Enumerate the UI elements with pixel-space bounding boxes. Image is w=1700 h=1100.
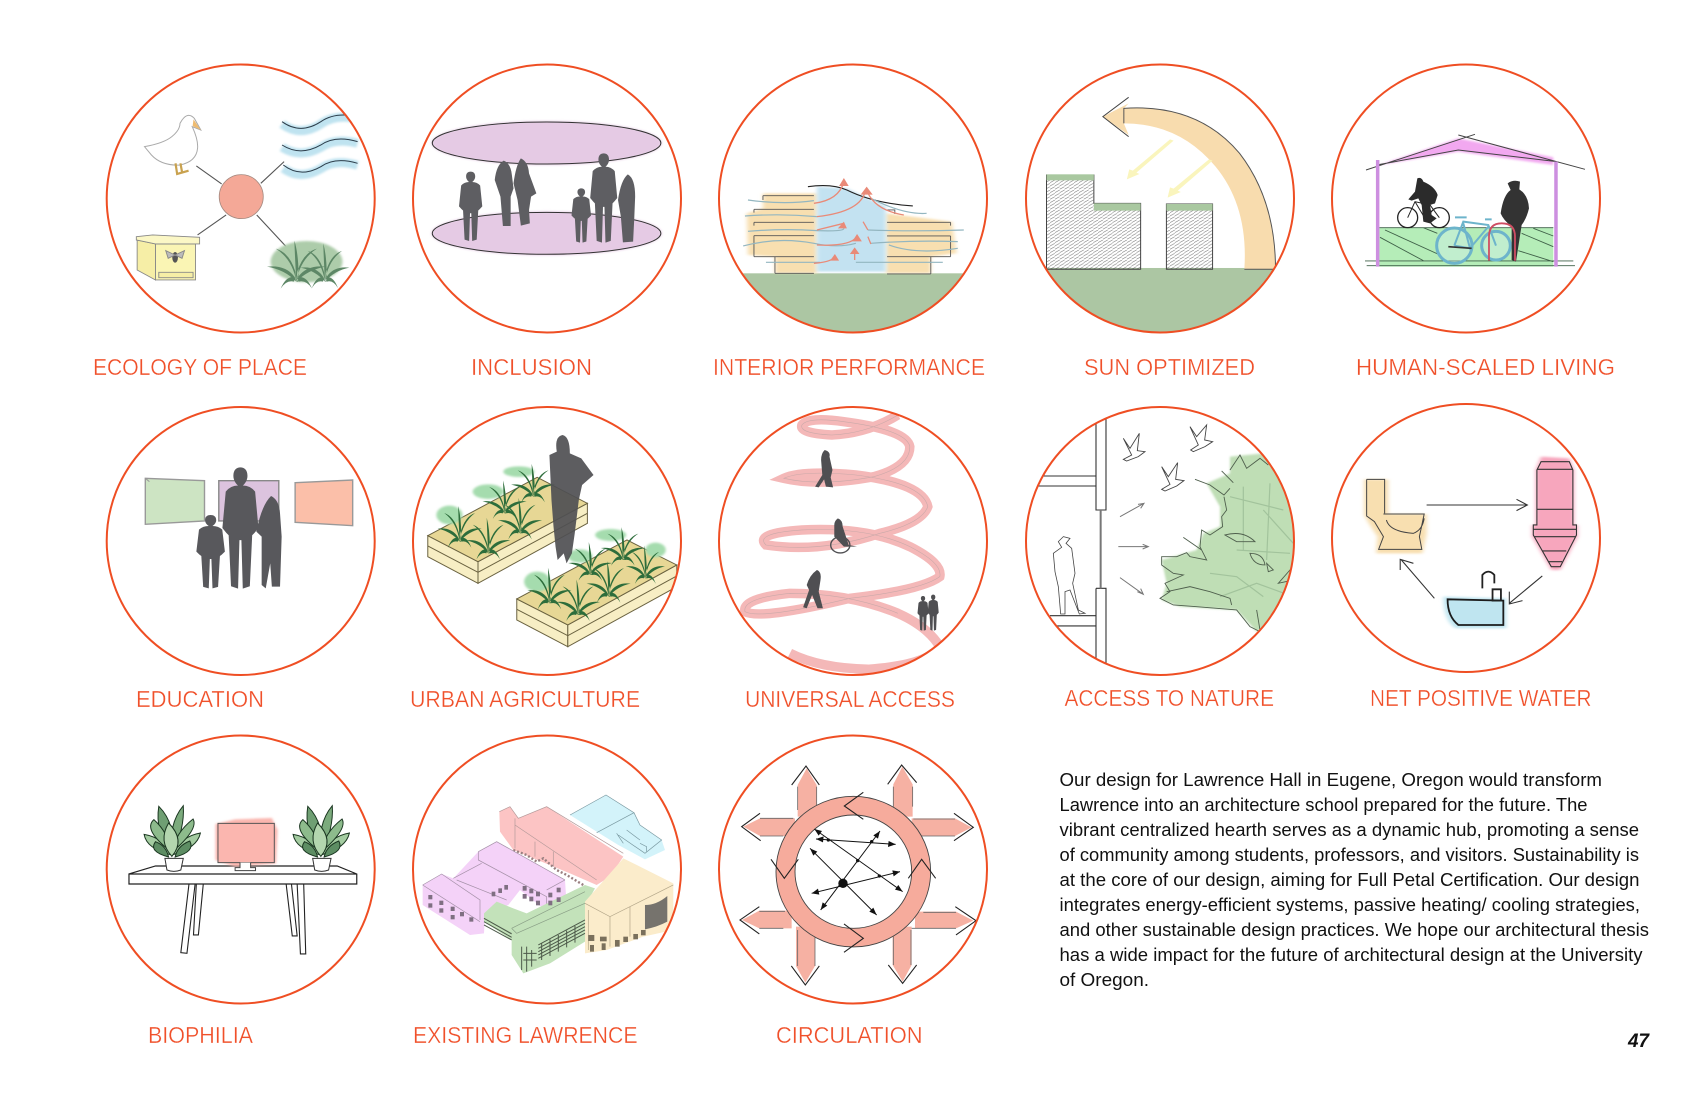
project description text block: of community among students, professors, and visitors. Sustainability is: [1060, 844, 1639, 865]
panel: inclusion: [413, 64, 681, 380]
net positive water illustration: [1364, 457, 1578, 628]
inner movement arrows: [810, 829, 903, 915]
atrium: [817, 187, 886, 272]
project description text block: Our design for Lawrence Hall in Eugene, Oregon would transform: [1060, 769, 1602, 790]
green wing facade: [484, 918, 585, 972]
toilet: [1364, 479, 1427, 553]
panel: universal access: [719, 407, 987, 712]
flow arrows: [1400, 499, 1542, 604]
hearth ring: [776, 796, 931, 947]
sun path: [1103, 97, 1276, 269]
purple display: [219, 481, 279, 521]
ring: [413, 64, 681, 332]
project description text block: and other sustainable design practices. We hope our architectural thesis: [1060, 919, 1649, 940]
cyclist: [1398, 178, 1449, 228]
label: INCLUSION: [471, 354, 592, 380]
connector lines: [196, 162, 286, 247]
air currents: [743, 198, 964, 262]
blue wing: [570, 795, 665, 859]
hatched buildings: [1047, 175, 1213, 269]
ring direction chevrons: [771, 792, 936, 952]
tree: [1160, 453, 1300, 632]
panel: sun optimized: [1025, 64, 1295, 375]
walker two: [803, 570, 823, 608]
ring: [1332, 64, 1600, 332]
view arrows: [1118, 503, 1148, 594]
right plant: [293, 806, 349, 871]
ring: [719, 64, 987, 332]
project description text block: integrates energy-efficient systems, passive heating/ cooling strategies,: [1060, 894, 1640, 915]
green roofs: [1047, 174, 1213, 211]
label: CIRCULATION: [776, 1022, 922, 1048]
panel: interior performance: [714, 64, 988, 375]
arrowheads: [740, 765, 976, 985]
project description text block: [1060, 769, 1649, 990]
human-scaled illustration: [1365, 134, 1585, 267]
ramp edge: [745, 415, 940, 614]
label: ECOLOGY OF PLACE: [93, 354, 307, 380]
beehive: [136, 235, 200, 280]
ring: [107, 736, 375, 1004]
panel: circulation: [719, 736, 987, 1048]
inclusion illustration: [431, 121, 662, 255]
cream wing: [585, 858, 673, 953]
panel: existing lawrence: [413, 736, 681, 1048]
page number: 47: [1627, 1031, 1650, 1052]
purple wing: [423, 842, 567, 935]
label: URBAN AGRICULTURE: [410, 686, 640, 712]
panel: biophilia: [107, 736, 375, 1048]
label: NET POSITIVE WATER: [1370, 685, 1592, 711]
ground: [1047, 268, 1272, 332]
water waves: [282, 115, 358, 175]
birds: [1123, 425, 1213, 491]
walker one: [815, 450, 833, 487]
bike rack: [1489, 223, 1515, 261]
panel: ecology of place: [93, 64, 375, 380]
project description text block: has a wide impact for the future of architectural design at the University: [1060, 944, 1643, 965]
ring: [719, 407, 987, 675]
label: HUMAN-SCALED LIVING: [1356, 354, 1615, 380]
window: [1100, 510, 1102, 588]
roof: [1366, 134, 1585, 170]
people silhouettes: [459, 153, 635, 243]
ring: [107, 407, 375, 675]
interior performance illustration: [743, 178, 964, 332]
floor: [1379, 228, 1553, 267]
label: UNIVERSAL ACCESS: [745, 686, 955, 712]
planter box two: [517, 540, 677, 647]
ring: [107, 64, 375, 332]
panel: education: [107, 407, 375, 712]
panel: urban agriculture: [410, 407, 681, 712]
urban agriculture illustration: [428, 435, 677, 647]
ring: [1026, 64, 1294, 332]
sink: [1443, 572, 1506, 628]
universal access illustration: [745, 415, 940, 669]
reclaim cistern: [1532, 457, 1578, 570]
ring: [1026, 407, 1294, 675]
couple: [917, 595, 939, 631]
standing woman: [549, 435, 594, 563]
cream wing facade: [588, 896, 667, 952]
project description text block: vibrant centralized hearth serves as a dynamic hub, promoting a sense: [1060, 819, 1639, 840]
panel: net positive water: [1332, 404, 1600, 711]
floor plates: [754, 196, 951, 274]
ecology illustration: [136, 115, 358, 289]
warm floors: [747, 193, 957, 273]
ring: [719, 736, 987, 1004]
spiral ramp: [745, 415, 940, 669]
ring: [1332, 404, 1600, 672]
roof line: [808, 186, 913, 206]
biophilia illustration: [129, 806, 357, 954]
circulation illustration: [740, 765, 976, 985]
peach display: [295, 480, 353, 526]
project description text block: at the core of our design, aiming for Full Petal Certification. Our design: [1060, 869, 1640, 890]
label: EDUCATION: [136, 686, 264, 712]
label: BIOPHILIA: [148, 1022, 253, 1048]
wheelchair user: [831, 518, 857, 553]
rising air arrows: [814, 178, 904, 263]
project description text block: Lawrence into an architecture school prepared for the future. The: [1060, 794, 1588, 815]
planted crops: [438, 464, 665, 621]
green wing: [484, 885, 595, 973]
posts: [1378, 160, 1556, 267]
plants: [267, 241, 349, 289]
green display: [145, 478, 205, 524]
arrow edges: [759, 787, 956, 966]
upper disc: [431, 121, 662, 165]
wall and floors: [1037, 410, 1106, 673]
sun optimized illustration: [1046, 96, 1276, 332]
planter box one: [428, 477, 587, 583]
education illustration: [145, 467, 353, 589]
green leaf washes: [436, 466, 666, 592]
blue bicycle: [1437, 217, 1510, 263]
tabletop: [129, 866, 357, 884]
label: ACCESS TO NATURE: [1064, 685, 1274, 711]
stair hatching: [513, 850, 583, 885]
label: SUN OPTIMIZED: [1084, 354, 1255, 380]
label: INTERIOR PERFORMANCE: [713, 354, 985, 380]
family silhouettes: [196, 467, 282, 589]
pink wing: [499, 807, 623, 885]
left plant: [144, 806, 200, 871]
ring: [413, 736, 681, 1004]
monitor: [216, 818, 278, 871]
floor lines: [1365, 228, 1575, 266]
person outline: [1053, 537, 1085, 614]
panel: access to nature: [1026, 407, 1300, 711]
purple wing windows: [428, 885, 561, 922]
central hub: [219, 175, 263, 219]
standing person: [1501, 181, 1529, 262]
solar rays: [1127, 139, 1213, 198]
existing lawrence illustration: [423, 795, 673, 973]
panel: human-scaled living: [1332, 64, 1615, 380]
table legs: [181, 884, 306, 954]
project description text block: of Oregon.: [1060, 969, 1149, 990]
ring: [413, 407, 681, 675]
access to nature illustration: [1037, 410, 1300, 673]
lower disc: [431, 211, 662, 255]
label: EXISTING LAWRENCE: [413, 1022, 638, 1048]
ground: [743, 273, 963, 332]
duck: [144, 115, 201, 174]
outward arrow washes: [742, 767, 973, 983]
